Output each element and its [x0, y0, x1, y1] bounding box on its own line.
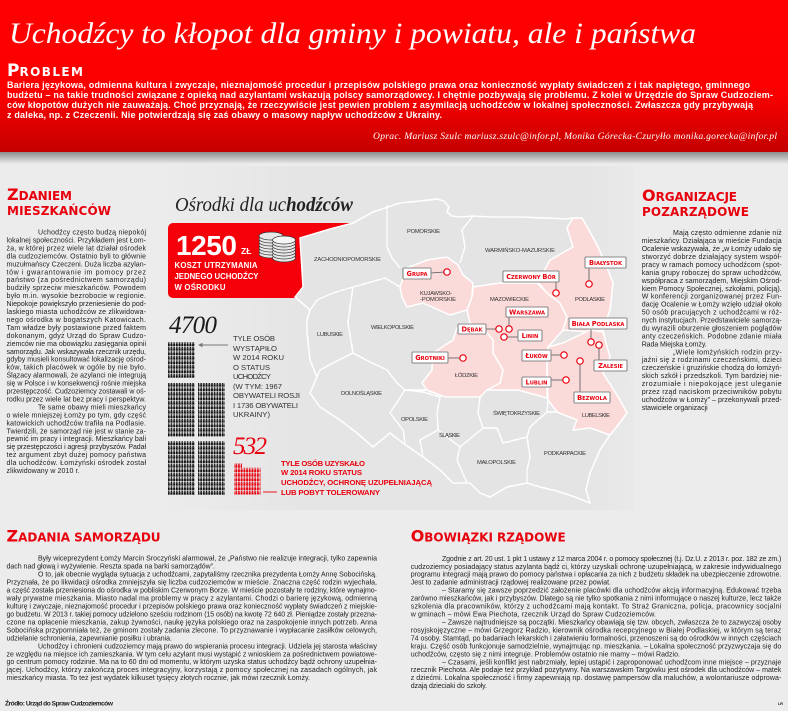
heading: O: [642, 186, 656, 205]
label: Czerwony Bór: CZERWONY BÓR: [506, 273, 556, 281]
problem text: [7, 80, 773, 120]
body text: anty czeczeńskich. Podobne zdanie miała: [642, 333, 782, 340]
cost caption: JEDNEGO UCHODŹCY: [174, 272, 259, 281]
cost figures: ZŁ: [241, 246, 251, 256]
region borders: [310, 205, 557, 483]
region names: ŚLĄSKIE: [439, 431, 460, 439]
region names: PODLASKIE: [575, 297, 605, 303]
body text: [410, 556, 782, 690]
body text: – Staramy się zawsze poprzedzić założenie placówki dla uchodźców akcją informacyjną. Edukować trzeba: [442, 588, 781, 595]
heading: [7, 185, 111, 218]
caption: O STATUS: [233, 363, 270, 372]
body text: [641, 230, 783, 412]
people rows: [168, 342, 225, 495]
body text: kulturę i zwyczaje, nieznajomość procedur i przepisów polskiego prawa oraz konieczność wypłaty świadczeń z miejskie-: [6, 603, 378, 610]
label: Biała Podlaska: [569, 318, 627, 329]
body text: mieszkańcy. Działająca w mieście Fundacja: [642, 238, 782, 245]
body text: kiem Pomocy Społecznej, szkołami, policją).: [642, 286, 782, 293]
body text: laskiego miasta uchodźców ze zlikwidowa-: [6, 309, 147, 316]
body text: samorządu. Jak wskazywała rzecznik urzędu,: [6, 349, 146, 356]
heading: Z: [7, 185, 19, 204]
body text: Zgodnie z art. 20 ust. 1 pkt 1 ustawy z 12 marca 2004 r. o pomocy społecznej (t.j. Dz.U. z 2013 r. poz. 182 ze zm.): [442, 556, 781, 563]
label: Grupa: GRUPA: [407, 270, 427, 278]
region: podlaskie: [538, 218, 613, 332]
caption: I 1736 OBYWATELI: [233, 401, 298, 410]
body text: pewnić im pracy i integracji. Mieszkańcy bali: [6, 436, 146, 443]
body text: Ocalenie wskazywała, że „w Łomży udało się: [642, 246, 782, 253]
label: Dębak: DĘBAK: [461, 326, 483, 334]
label: Łuków: [522, 350, 551, 361]
region names: DOLNOŚLĄSKIE: [341, 389, 382, 397]
panel: cost callout: [168, 223, 363, 298]
body text: mieszkańcy miasta. To też jest wydatek kilkuset tysięcy złotych rocznie, jak mówi rzecznik Łomży.: [6, 675, 310, 682]
body text: współpraca z samorządem, Miejskim Ośrod-: [641, 278, 782, 285]
body text: ków, takich placówek w ogóle by nie było.: [6, 365, 146, 372]
body text: du wyrazili oburzenie głoszeniem poglądów: [642, 326, 783, 332]
body text: o wiele mniejszej Łomży po tym, gdy część: [6, 412, 146, 419]
label: Lublin: [522, 377, 551, 387]
body text: Uchodźcy i chronieni cudzoziemcy mają prawo do wspierania procesu integracji. Udziela jej starosta właściwy: [38, 643, 378, 650]
body text: uchodźców, często się z nimi integruje. Problemów ostatnio nie mamy – mówi Radzio.: [411, 651, 680, 658]
body text: O to, jak obecnie wygląda sytuacja z uchodźcami, zapytaliśmy rzecznika prezydenta Łomży Annę Sobocińską.: [38, 572, 377, 578]
body text: rosyjskojęzyczne – mówi Grzegorz Radzio, kierownik ośrodka recepcyjnego w Białej Podlaskiej, w którym są teraz: [411, 627, 782, 634]
body text: zarówno mieszkańców, jak i przybyszów. Dlatego są nie tylko spotkania z nimi informujące o naszej kulturze, lecz także: [411, 596, 781, 603]
number: 1250 zł: 1250: [176, 230, 237, 261]
country outline: [295, 199, 627, 503]
body text: programu integracji mają prawo do pomocy państwa i opłacania za nich z budżetu składek na ubezpieczenie zdrowotne.: [411, 572, 781, 579]
body text: 74 osoby. Stamtąd, po badaniach lekarskich i załatwieniu formalności, przenoszeni są do ośrodków w innych częściach: [411, 635, 781, 642]
body text: też argument zbyt dużej pomocy państwa: [6, 452, 146, 459]
body text: Te same obawy mieli mieszkańcy: [38, 404, 146, 411]
label: Warszawa: WARSZAWA: [509, 308, 545, 316]
icon: coins: [259, 232, 296, 262]
body text: go centrum pomocy rodzinie. Ma na to 60 dni od momentu, w którym uzyska status uchodźcy bądź ochrony uzupełnia-: [6, 659, 378, 666]
heading: POZARZĄDOWE: [642, 205, 749, 219]
body text: Sobocińska przypomniała też, że gminom zostały zadania zlecone. To przyznawanie i wypłacanie zasiłków celowych,: [6, 627, 377, 634]
label: Bezwola: BEZWOLA: [577, 394, 607, 402]
body text: dla cudzoziemców. Ostatnio byli to głównie: [6, 253, 146, 260]
heading: RGANIZACJE: [656, 190, 737, 204]
caption: W 2014 ROKU STATUS: [281, 468, 362, 477]
body text: z dziećmi. Lokalna społeczność i firmy zapewniają np. dostawę pampersów dla maluchów, a wolontariusze odprowa-: [411, 675, 782, 682]
region names: PODKARPACKIE: [544, 451, 586, 457]
body text: rzecznik Piechota. Ale podaje też przykład pozytywny. Na warszawskim Targówku jest ośrodek dla uchodźców – matek: [411, 667, 782, 674]
cost caption: [174, 261, 259, 292]
body text: gdyby musieli konsultować lokalizację ośrod-: [6, 357, 147, 364]
body text: dację Ocalenie w Łomży wzięło udział około: [642, 302, 782, 309]
body text: „Wiele łomżyńskich rodzin przy-: [673, 349, 782, 356]
caption: (W TYM: 1967: [233, 382, 282, 391]
panel: obowiązki rządowe: [410, 527, 782, 690]
region: kujawsko-pomorskie: [400, 257, 473, 315]
body text: cudzoziemcy posiadający status azylanta bądź ci, którzy uzyskali ochronę uzupełniającą, w zakresie indywidualnego: [411, 564, 781, 571]
body text: ża, w której przez wiele lat działał ośrodek: [6, 245, 146, 252]
body text: – Czasami, jeśli konflikt jest nabrzmiały, lepiej ustąpić i zaproponować uchodźcom inne miejsce – przyznaje: [442, 659, 781, 666]
body text: Mają często odmienne zdanie niż: [673, 230, 782, 237]
region: mazowieckie: [467, 283, 567, 398]
heading: problem: ROBLEM: [20, 65, 83, 79]
body text: dzają dzieciaki do szkoły.: [411, 683, 487, 690]
body text: Twierdzili, że samorząd nie jest w stanie za-: [6, 428, 147, 435]
region names: OPOLSKIE: [401, 417, 428, 423]
body text: stworzyć dobrze działający system współ-: [642, 254, 782, 261]
caption: [233, 334, 300, 419]
body text: Uchodźcy często budzą niepokój: [38, 230, 146, 236]
body text: dla uchodźców. Łomżyński ośrodek został: [6, 460, 146, 467]
region names: WARMIŃSKO-MAZURSKIE: [485, 247, 555, 254]
heading: [6, 527, 160, 546]
pictogram: 4700 applicants: [168, 312, 300, 495]
heading: problem: P: [7, 61, 19, 81]
body text: Niepokoje powiększyło przeniesienie do pod-: [6, 301, 147, 308]
map of Poland: [295, 199, 627, 503]
body text: skich szkół i przedszkoli. Tym bardziej nie-: [642, 373, 782, 380]
title: Uchodźcy to kłopot dla gminy i powiatu, ale i państwa: [9, 17, 696, 50]
number: 532: 532: [233, 433, 267, 460]
label: Zalesie: [594, 360, 627, 371]
problem text: budżetu – na takie trudności związane z opieką nad azylantami wskazują polscy samorządowcy. I chętnie pozbywają się problemu. Z kolei w Urzędzie do Spraw Cudzoziem-: [7, 90, 773, 100]
body text: [6, 230, 147, 475]
heading: Z: [6, 527, 18, 546]
connector lines: [431, 268, 599, 392]
body text: stawiciele organizacji: [642, 405, 708, 412]
heading: MIESZKAŃCÓW: [7, 203, 111, 218]
label: Linin: LININ: [522, 332, 538, 340]
body text: zlikwidowany w 2010 r.: [6, 468, 80, 475]
region names: ŁÓDZKIE: [455, 372, 478, 379]
body text: dokonanym, gdyż Urząd do Spraw Cudzo-: [6, 333, 147, 340]
panel: zdaniem mieszkańców: [6, 185, 147, 475]
region: łódzkie: [422, 323, 503, 397]
body text: wały prywatne mieszkania. Miasto nadal ma problemy w pracy z azylantami. Chodzi o barierę językową, odmienną: [6, 595, 377, 602]
body text: w gminach – mówi Ewa Piechota, rzecznik Urząd do Spraw Cudzoziemców.: [410, 612, 656, 618]
body text: Jest to zadanie administracji rządowej realizowane przez powiat.: [411, 580, 611, 587]
number: 4700: 4700: [169, 312, 218, 339]
body text: ze względu na miejsce ich zamieszkania. W tym celu azylant musi wystąpić z wnioskiem za pośrednictwem powiatowe-: [6, 651, 378, 658]
source note: Źródło: Urząd do Spraw Cudzoziemców: [5, 698, 114, 708]
body text: czeczeńskie i gruzińskie chodzą do łomżyń-: [642, 365, 782, 372]
cost caption: KOSZT UTRZYMANIA: [174, 261, 258, 270]
map background panel: [157, 166, 634, 510]
body text: przez rząd naciskom przeciwników pobytu: [642, 389, 782, 396]
region names: POMORSKIE: [407, 229, 440, 235]
credit line: Oprac. Mariusz Szulc mariusz.szulc@infor.pl, Monika Górecka-Czuryłło monika.gorecka@infor.pl: [373, 131, 777, 142]
body text: – Zawsze najtrudniejsze są początki. Mieszkańcy obawiają się tzw. obcych, zwłaszcza że to zazwyczaj osoby: [442, 620, 782, 626]
body text: katowickich uchodźców trafiła na Podlasie.: [6, 420, 146, 427]
map title: Ośrodki dla uchodźców: [175, 195, 354, 216]
caption: TYLE OSÓB UZYSKAŁO: [281, 459, 365, 468]
connector: [263, 491, 277, 493]
body text: budziły sprzeciw mieszkańców. Powodem: [6, 285, 146, 292]
label: Linin: [518, 330, 542, 341]
region names: LUBUSKIE: [317, 332, 343, 338]
label: Grupa: [403, 268, 431, 279]
heading: problem: [7, 61, 83, 81]
cost figures: [174, 230, 296, 292]
cost caption: W OŚRODKU: [174, 283, 226, 292]
body text: udzielanie schronienia, zapewnianie posiłku i ubrania.: [6, 635, 172, 642]
body text: się przestępczości i agresji przybyszów. Padał: [6, 444, 146, 451]
heading: O: [411, 527, 424, 546]
label: Bezwola: [574, 392, 610, 403]
pictogram: 532 granted: [233, 433, 432, 497]
problem text: Bariera językowa, odmienna kultura i zwyczaje, nieznajomość procedur i przepisów polskiego prawa oraz konieczność wypłaty świadczeń z i tak napiętego, gminnego: [7, 80, 750, 90]
panel: organizacje pozarządowe: [641, 186, 783, 412]
region names: ZACHODNIOPOMORSKIE: [314, 257, 381, 263]
header band: [0, 0, 788, 164]
region names: MAŁOPOLSKIE: [477, 460, 516, 466]
body text: tów i gwarantowanie im pomocy przez: [6, 269, 146, 276]
body text: jaźni się z rodzinami czeczeńskimi, dzieci: [641, 357, 782, 364]
body text: się w Polsce i w konsekwencji rośnie miejska: [6, 381, 146, 388]
region names: KUJAWSKO-: [420, 291, 452, 297]
body text: szkolenia dla pracowników, którzy z uchodźcami mają kontakt. To Straż Graniczna, policja, pracownicy socjalni: [411, 604, 782, 611]
region names: WIELKOPOLSKIE: [371, 325, 414, 331]
body text: Były wiceprezydent Łomży Marcin Sroczyński alarmował, że „Państwo nie realizuje integracji, tylko zapewnia: [38, 556, 377, 562]
body text: [6, 556, 378, 682]
panel: zadania samorządu: [6, 527, 378, 682]
caption: [281, 459, 432, 497]
body text: Tam władze były postawione przed faktem: [6, 325, 146, 332]
label: Łuków: ŁUKÓW: [524, 352, 548, 360]
location markers: [444, 269, 602, 383]
body text: W konferencji zorganizowanej przez Fun-: [642, 294, 782, 301]
label: Biała Podlaska: BIAŁA PODLASKA: [572, 320, 624, 328]
heading: BOWIĄZKI RZĄDOWE: [424, 531, 566, 545]
caption: OBYWATELI ROSJI: [233, 391, 300, 400]
heading: [411, 527, 566, 546]
body text: kania grupy roboczej do spraw uchodźców,: [642, 270, 782, 277]
body text: nych instytucjach. Przedstawiciele samorzą-: [642, 318, 782, 324]
label: Grotniki: [412, 352, 448, 363]
heading: [642, 186, 749, 219]
pink regions: [400, 218, 627, 435]
body text: jącej. Uchodźcy, którzy zakończą proces integracyjny, korzystają z pomocy społecznej na zasadach ogólnych, jak: [6, 667, 378, 674]
label: Zalesie: ZALESIE: [598, 362, 623, 370]
body text: kraju. Część osób funkcjonuje samodzielnie, wynajmując np. mieszkania. – Lokalna społeczność przyzwyczaja się do: [411, 643, 781, 650]
arrow: [199, 344, 228, 346]
body text: ziemców nie ma obowiązku zasięgania opinii: [6, 341, 146, 348]
body text: uchodźców w Łomży” – przekonywali przed-: [642, 397, 782, 404]
region names: ŚWIĘTOKRZYSKIE: [493, 409, 540, 417]
body text: rodku przez wiele lat bez pracy i perspektyw.: [6, 396, 146, 404]
label: Warszawa: [506, 307, 548, 317]
problem text: z daleka, np. z Czeczenii. Nie potwierdzają się zaś obawy o masowy napływ uchodźców z Ukrainy.: [7, 110, 442, 120]
body text: lokalnej społeczności. Przykładem jest Łom-: [6, 238, 147, 244]
body text: 50 osób pracujących z uchodźcami w róż-: [642, 310, 782, 317]
body text: nego ośrodka w bogatszych Katowicach.: [6, 317, 146, 324]
body text: czone na opłacenie mieszkania, zakup żywności, naukę języka polskiego oraz na zaspokojenie innych potrzeb. Anna: [6, 619, 377, 626]
body text: dach nad głową i wyżywienie. Reszta spada na barki samorządów”.: [6, 564, 215, 570]
body text: a część została przeniesiona do ośrodka w pobliskim Czerwonym Borze. W mieście pozostały te rodziny, które wynajmo-: [6, 587, 378, 594]
caption: W 2014 ROKU: [233, 353, 284, 362]
region: lubelskie: [547, 330, 627, 435]
body text: pracy w ramach pomocy uchodźcom (spot-: [642, 262, 782, 269]
body text: Rada Miejska Łomży.: [642, 341, 707, 348]
label: Białystok: BIAŁYSTOK: [589, 259, 623, 267]
label: Dębak: [458, 324, 486, 334]
label: Grotniki: GROTNIKI: [415, 354, 445, 362]
caption: WYSTĄPIŁO: [233, 344, 277, 353]
label: Czerwony Bór: [503, 271, 559, 282]
label: Lublin: LUBLIN: [526, 378, 547, 386]
body text: państwo (za pośrednictwem samorządu): [6, 277, 146, 284]
body text: Przyznała, że po likwidacji ośrodka zmniejszyła się liczba cudzoziemców w mieście. Znaczna część rodzin wyjechała,: [6, 579, 377, 586]
region names: MAZOWIECKIE: [490, 297, 529, 303]
region names: [314, 229, 610, 466]
body text: Ślązacy alarmowali, że azylanci nie integrują: [6, 371, 146, 380]
region names: LUBELSKIE: [582, 413, 610, 419]
region names: -POMORSKIE: [420, 297, 456, 303]
label: Białystok: [585, 257, 626, 268]
body text: go budżetu. W 2013 r. takiej pomocy udzielono sześciu rodzinom (15 osób) na kwotę 72 640 zł. Pieniądze zostały przezna-: [6, 611, 378, 618]
author initials: LR: [778, 701, 783, 706]
caption: UKRAINY): [233, 410, 270, 419]
body text: zrozumiałe i niepokojące jest uleganie: [642, 381, 782, 388]
people rows: [234, 463, 260, 494]
body text: muzułmańscy Czeczeni. Duża liczba azylan-: [6, 261, 147, 268]
caption: TYLE OSÓB: [233, 334, 275, 343]
heading: DANIEM: [19, 189, 72, 203]
body text: przestępczość. Cudzoziemcy zostawali w oś-: [6, 388, 147, 396]
body text: było m.in. wysokie bezrobocie w regionie.: [6, 293, 146, 300]
problem text: ców kłopotów dużych nie zauważają. Choć przyznają, że rzeczywiście jest pewien problem z asymilacją uchodźców w lokalnej społeczności. Zwłaszcza gdy przybywają: [7, 100, 754, 110]
heading: ADANIA SAMORZĄDU: [18, 531, 160, 545]
caption: UCHODŹCY, OCHRONĘ UZUPEŁNIAJĄCĄ: [281, 478, 432, 487]
caption: UCHODŹCY: [233, 372, 271, 381]
caption: LUB POBYT TOLEROWANY: [281, 488, 380, 497]
